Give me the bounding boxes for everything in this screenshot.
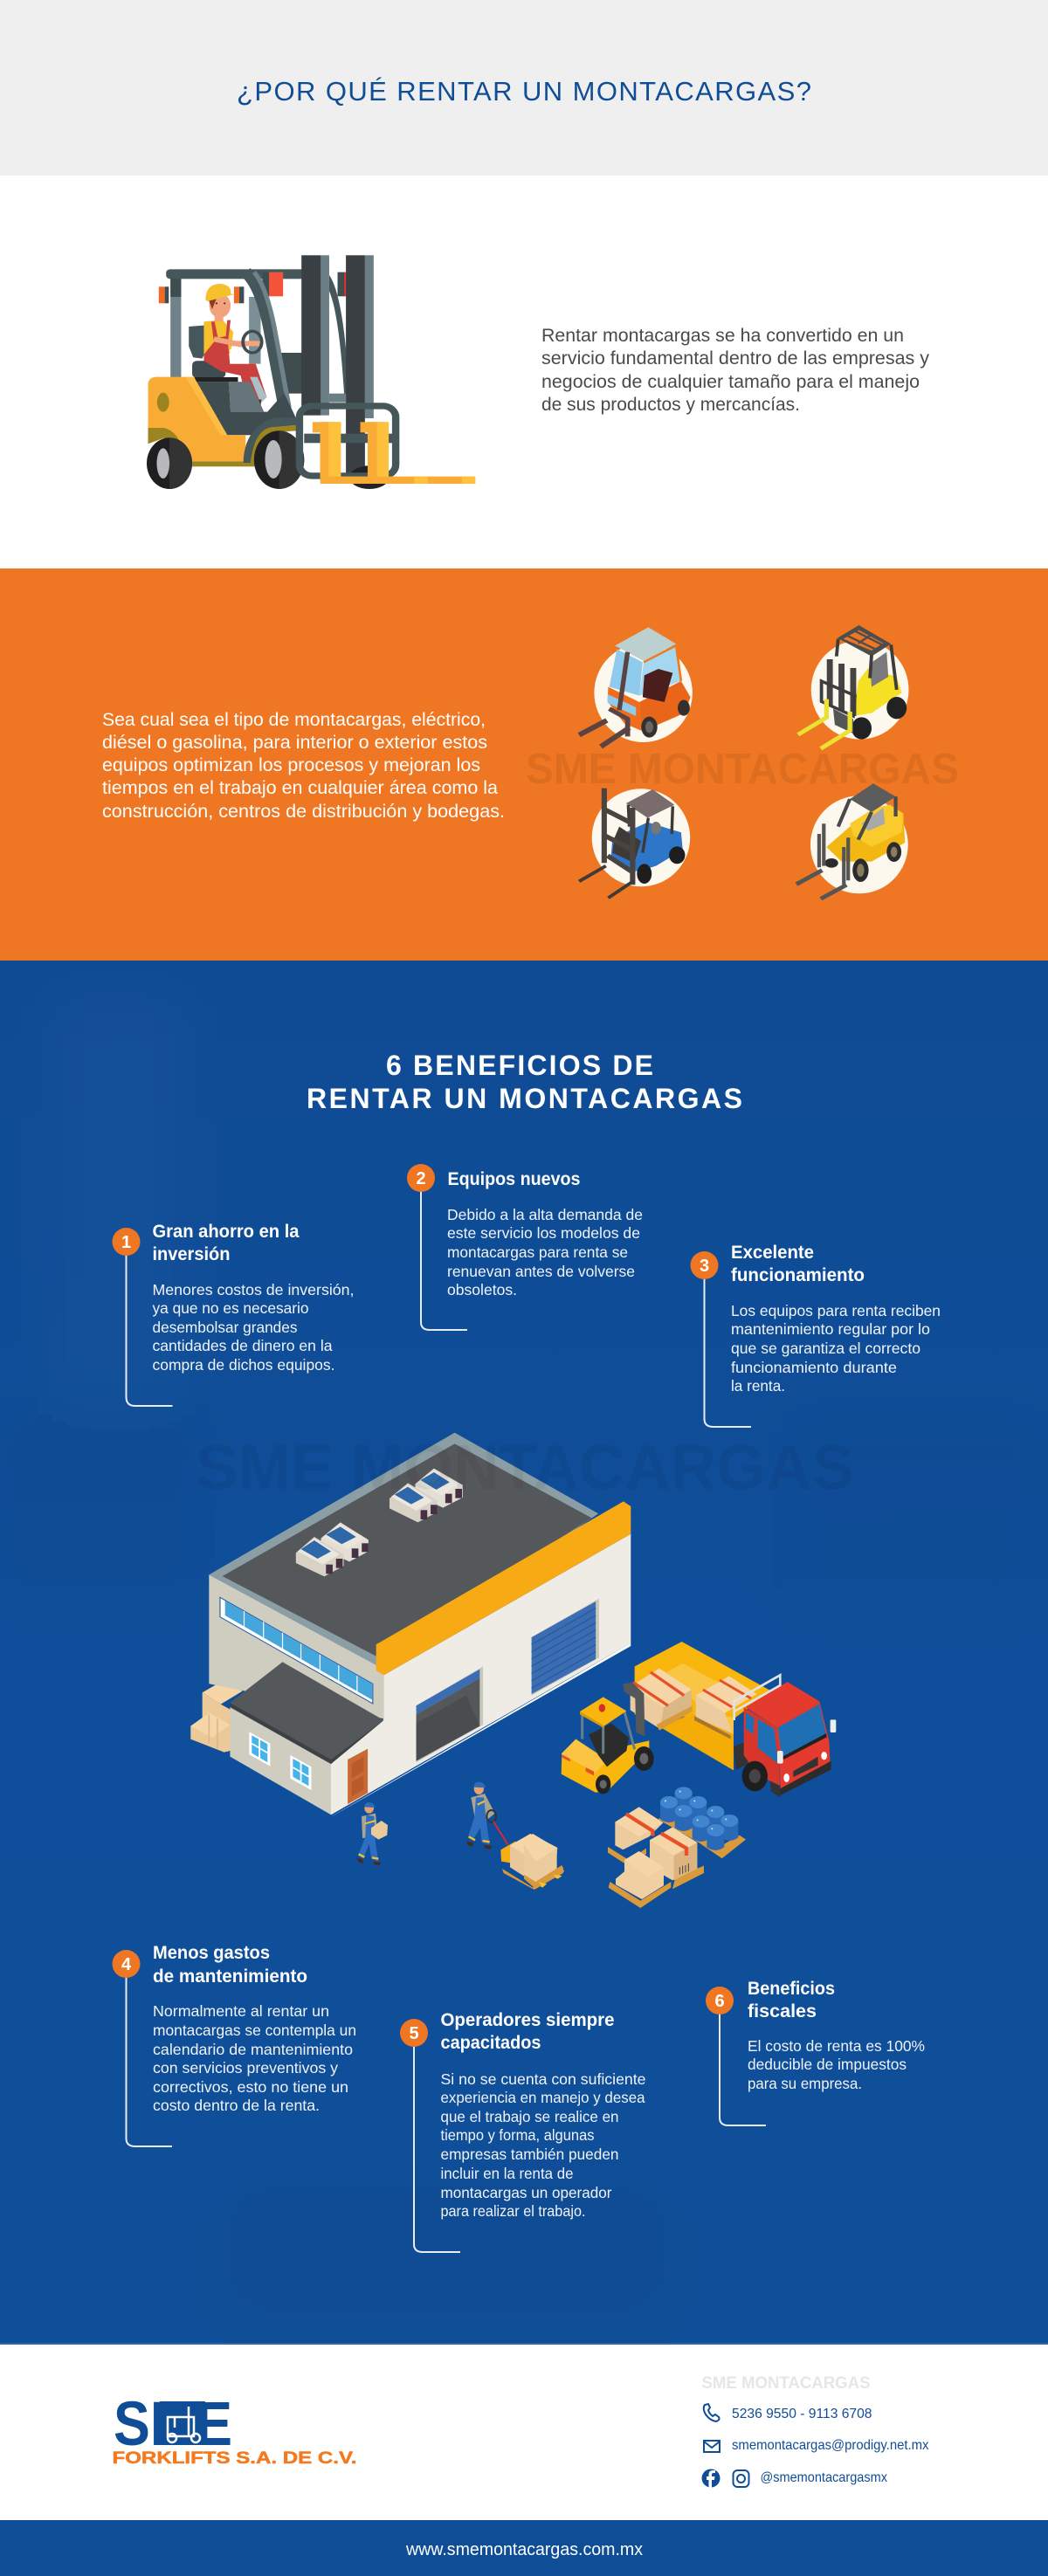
card 5 bbox=[400, 2010, 646, 2252]
illustration: forklift with driver bbox=[147, 255, 475, 489]
orange band bbox=[376, 1501, 631, 1675]
title: ¿POR QUÉ RENTAR UN MONTACARGAS? bbox=[237, 76, 811, 107]
card 5: capacitados bbox=[440, 2033, 541, 2053]
card 6: para su empresa. bbox=[748, 2075, 862, 2092]
loading dock door bbox=[417, 1666, 483, 1762]
card 4: costo dentro de la renta. bbox=[153, 2097, 320, 2114]
text: forklift types: diésel o gasolina, para interior o exterior estos bbox=[102, 733, 487, 753]
heading: 6 BENEFICIOS DE bbox=[386, 1050, 653, 1081]
intro text: Rentar montacargas se ha convertido en un bbox=[541, 326, 904, 346]
panel: intro bbox=[0, 176, 1048, 568]
boxes behind annex bbox=[190, 1680, 243, 1753]
card 3: Los equipos para renta reciben bbox=[731, 1302, 941, 1319]
card 6: Beneficios bbox=[748, 1979, 835, 1999]
card 3: mantenimiento regular por lo bbox=[731, 1320, 930, 1338]
card 2: montacargas para renta se bbox=[447, 1243, 628, 1261]
intro text bbox=[541, 326, 929, 415]
card 4: de mantenimiento bbox=[153, 1966, 307, 1987]
card 2: obsoletos. bbox=[447, 1281, 517, 1298]
card 4: Normalmente al rentar un bbox=[153, 2002, 329, 2020]
card 2: renuevan antes de volverse bbox=[447, 1263, 635, 1280]
contact details bbox=[702, 2374, 929, 2488]
card 2: 2 bbox=[416, 1169, 426, 1188]
contact details: @smemontacargasmx bbox=[760, 2470, 887, 2485]
card 2: este servicio los modelos de bbox=[447, 1224, 640, 1242]
building walls bbox=[209, 1574, 383, 1718]
large boxes on pallets bbox=[524, 1807, 704, 1908]
icon: instagram bbox=[734, 2470, 749, 2487]
card 5: incluir en la renta de bbox=[440, 2165, 573, 2182]
card 1: cantidades de dinero en la bbox=[152, 1337, 333, 1354]
illustration: warehouse building bbox=[190, 1433, 631, 1817]
worker carrying box bbox=[356, 1802, 388, 1865]
strip window bbox=[220, 1597, 373, 1704]
card 4: Menos gastos bbox=[153, 1943, 270, 1963]
watermark: SME MONTACARGAS bbox=[526, 746, 959, 793]
card 5: Si no se cuenta con suficiente bbox=[440, 2070, 646, 2088]
card 2: Equipos nuevos bbox=[447, 1169, 580, 1189]
watermark: SME MONTACARGAS bbox=[196, 1433, 854, 1503]
card 5: montacargas un operador bbox=[440, 2184, 612, 2201]
card 2: Debido a la alta demanda de bbox=[447, 1206, 643, 1223]
icon: blue forklift bbox=[579, 789, 690, 898]
roller shutter bbox=[532, 1599, 599, 1696]
card 6 bbox=[706, 1979, 925, 2125]
rooftop AC units bbox=[296, 1469, 463, 1576]
icon: gold forklift bbox=[796, 783, 908, 899]
card 1: Gran ahorro en la bbox=[152, 1222, 300, 1242]
illustration: workers and pallet jack bbox=[356, 1782, 563, 1890]
card 5: que el trabajo se realice en bbox=[440, 2108, 618, 2125]
contact details: 5236 9550 - 9113 6708 bbox=[732, 2407, 872, 2421]
card 4: 4 bbox=[121, 1955, 132, 1974]
text: forklift types: equipos optimizan los procesos y mejoran los bbox=[102, 755, 480, 775]
card 6: deducible de impuestos bbox=[748, 2056, 907, 2073]
worker pulling pallet jack bbox=[466, 1782, 563, 1890]
panel: footer bbox=[0, 2345, 1048, 2520]
truck rear boxes bbox=[694, 1676, 757, 1739]
card 3: funcionamiento bbox=[731, 1265, 865, 1285]
card 4 bbox=[112, 1943, 356, 2146]
card 3: 3 bbox=[700, 1257, 709, 1276]
card 3: la renta. bbox=[731, 1377, 785, 1395]
logo bbox=[112, 2390, 356, 2468]
card 1: 1 bbox=[121, 1233, 131, 1252]
card 1: desembolsar grandes bbox=[152, 1319, 298, 1336]
icon: yellow forklift front view bbox=[798, 625, 908, 748]
card 3: Excelente bbox=[731, 1243, 814, 1263]
card 3: funcionamiento durante bbox=[731, 1359, 897, 1376]
heading: RENTAR UN MONTACARGAS bbox=[307, 1083, 742, 1114]
text: forklift types bbox=[102, 710, 505, 822]
icon: phone bbox=[704, 2404, 720, 2421]
text: forklift types: construcción, centros de distribución y bodegas. bbox=[102, 802, 505, 822]
card 6: fiscales bbox=[748, 2001, 817, 2022]
card 5: experiencia en manejo y desea bbox=[440, 2089, 645, 2106]
logo: FORKLIFTS S.A. DE C.V. bbox=[112, 2449, 356, 2468]
card 1 bbox=[112, 1222, 355, 1406]
card 3: que se garantiza el correcto bbox=[731, 1340, 920, 1357]
icon: email bbox=[704, 2441, 720, 2452]
card 4: con servicios preventivos y bbox=[153, 2059, 338, 2077]
card 5: empresas también pueden bbox=[440, 2146, 618, 2163]
card 4: correctivos, esto no tiene un bbox=[153, 2078, 348, 2096]
card 1: inversión bbox=[152, 1244, 231, 1264]
card 1: Menores costos de inversión, bbox=[152, 1281, 355, 1298]
card 5: Operadores siempre bbox=[440, 2010, 615, 2030]
annex bbox=[230, 1662, 383, 1815]
intro text: servicio fundamental dentro de las empresas y bbox=[541, 348, 929, 368]
illustration: truck, forklift and pallets bbox=[524, 1642, 836, 1908]
heading bbox=[307, 1050, 742, 1114]
card 5: tiempo y forma, algunas bbox=[440, 2126, 595, 2144]
card 6: 6 bbox=[714, 1992, 725, 2011]
forklift lifting pallet bbox=[562, 1669, 693, 1794]
panel: website bar bbox=[0, 2520, 1048, 2576]
icon: facebook bbox=[702, 2469, 720, 2488]
card 6: El costo de renta es 100% bbox=[748, 2037, 925, 2055]
text: forklift types: Sea cual sea el tipo de montacargas, eléctrico, bbox=[102, 710, 486, 730]
panel: forklift types bbox=[0, 568, 1048, 961]
card 5: 5 bbox=[409, 2024, 419, 2043]
contact details: smemontacargas@prodigy.net.mx bbox=[732, 2438, 929, 2453]
truck bbox=[635, 1642, 836, 1797]
intro text: de sus productos y mercancías. bbox=[541, 395, 800, 415]
website url: www.smemontacargas.com.mx bbox=[405, 2540, 643, 2559]
panel: header bbox=[0, 0, 1048, 176]
card 3 bbox=[690, 1243, 941, 1427]
card 1: ya que no es necesario bbox=[152, 1299, 309, 1317]
barrels on pallet bbox=[658, 1787, 746, 1858]
icon: electric forklift with cabin bbox=[579, 627, 693, 747]
contact details: SME MONTACARGAS bbox=[702, 2374, 870, 2393]
logo: SME bbox=[114, 2390, 232, 2459]
illustrations: four forklift types bbox=[579, 625, 908, 899]
text: forklift types: tiempos en el trabajo en cualquier área como la bbox=[102, 778, 498, 798]
intro text: negocios de cualquier tamaño para el manejo bbox=[541, 372, 920, 392]
card 4: calendario de mantenimiento bbox=[153, 2041, 353, 2058]
card 4: montacargas se contempla un bbox=[153, 2022, 356, 2039]
card 1: compra de dichos equipos. bbox=[152, 1356, 335, 1374]
card 5: para realizar el trabajo. bbox=[440, 2202, 585, 2220]
panel: benefits bbox=[0, 961, 1048, 2345]
card 2 bbox=[407, 1164, 643, 1330]
